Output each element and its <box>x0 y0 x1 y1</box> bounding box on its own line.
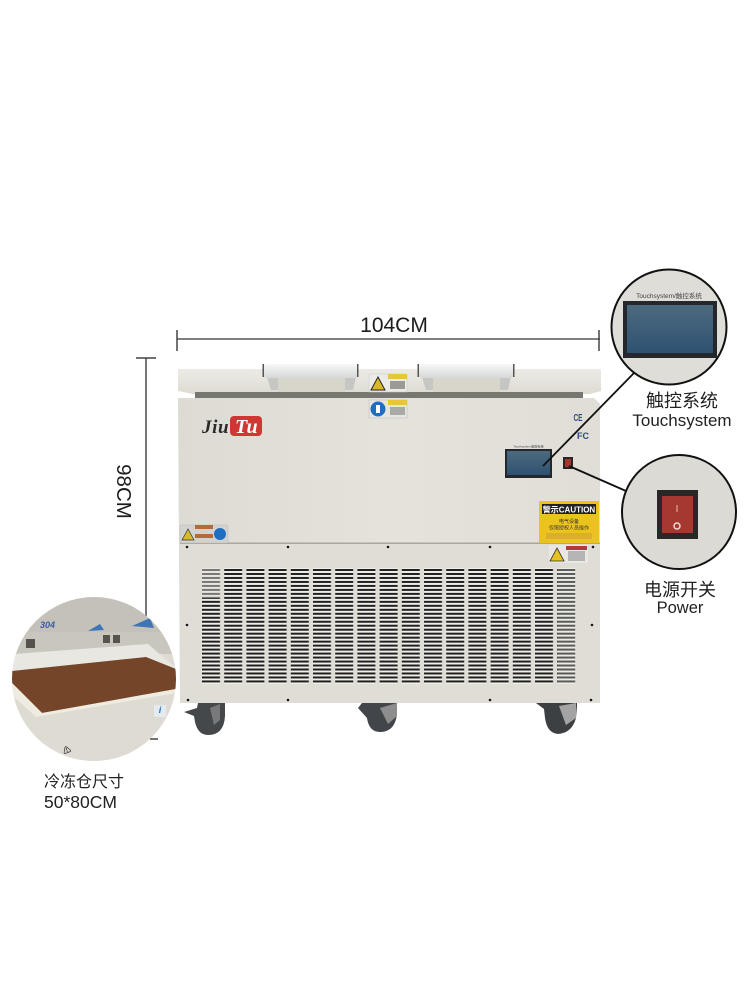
infographic canvas <box>12 268 737 808</box>
freezer unit <box>178 364 601 735</box>
callout: power switch: Power <box>657 599 704 617</box>
handle left <box>262 364 358 392</box>
screws <box>185 545 595 702</box>
callout: freezer compartment <box>12 597 176 808</box>
callout: freezer compartment: i <box>159 705 162 715</box>
power switch <box>563 457 573 469</box>
handle right <box>418 364 514 392</box>
callout: freezer compartment: 50*80CM <box>44 792 117 812</box>
ventilation grille <box>202 568 576 684</box>
callout: freezer compartment: 304 <box>40 620 55 630</box>
callout: touch system: 触控系统 <box>646 391 718 411</box>
callout: touch system: Touchsystem/触控系统 <box>636 291 702 300</box>
logo: JiuTu: Tu <box>235 416 258 438</box>
safety sticker blue <box>369 400 407 418</box>
logo: JiuTu <box>201 416 262 438</box>
touch screen <box>505 444 552 478</box>
logo: JiuTu: Jiu <box>201 417 229 438</box>
leader line: touch system <box>543 373 634 466</box>
caution label: 警示CAUTION <box>543 504 595 514</box>
lid <box>178 369 601 398</box>
CE and FC marks: CE <box>574 413 583 424</box>
CE and FC marks <box>574 413 589 441</box>
dimension: height 98CM: 98CM <box>112 464 135 519</box>
caution label: 仅限授权人员操作 <box>549 524 589 532</box>
leader line: power <box>569 466 626 491</box>
cabinet body <box>178 398 600 703</box>
callout: touch system <box>612 270 732 430</box>
warning sticker left <box>180 525 228 543</box>
callout: freezer compartment: 冷冻仓尺寸 <box>44 773 124 791</box>
callout: touch system: Touchsystem <box>632 411 732 430</box>
callout: power switch <box>622 455 736 617</box>
touch screen: Touchsystem/触控系统 <box>513 444 544 448</box>
caution label: 电气设备 <box>559 518 579 525</box>
casters <box>184 703 577 735</box>
dimension: width 104CM: 104CM <box>360 314 428 337</box>
warning sticker top <box>369 374 407 392</box>
caution label <box>539 501 599 543</box>
callout: power switch: 电源开关 <box>644 580 716 600</box>
CE and FC marks: FC <box>577 431 589 441</box>
callout: freezer compartment: ⚠ <box>62 745 72 756</box>
warning sticker right <box>549 545 588 563</box>
